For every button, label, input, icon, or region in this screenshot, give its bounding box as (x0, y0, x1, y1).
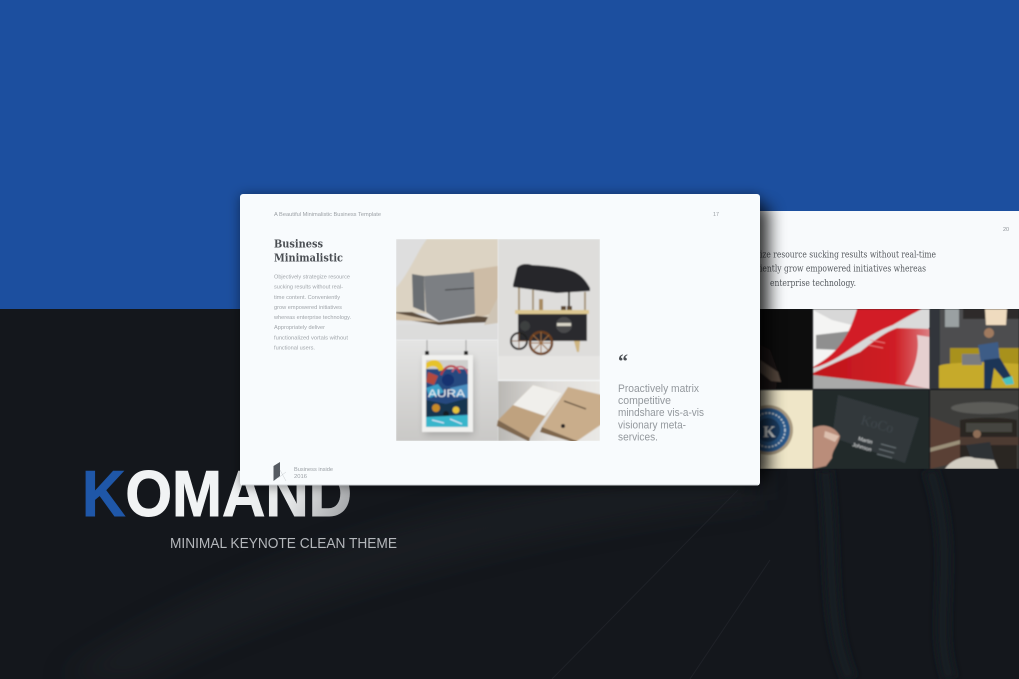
photo: business card in hand: Johnson (851, 442, 872, 453)
body text: grow empowered initiatives (274, 305, 342, 311)
quote text: Proactively matrix (618, 383, 699, 395)
photo: business card in hand: Martin (857, 436, 873, 446)
subtitle: MINIMAL KEYNOTE CLEAN THEME (170, 535, 397, 552)
photo grid: main slide (396, 239, 602, 443)
panel: back slide, page 20 (743, 211, 1019, 469)
body text (273, 274, 351, 352)
photo: man on yellow sofa (930, 309, 1019, 389)
body text: sucking results without real- (274, 284, 343, 290)
photo: black food cart (498, 239, 600, 380)
page number 17: 17 (713, 212, 719, 218)
footer text (294, 467, 333, 480)
body text: whereas enterprise technology. (273, 315, 351, 321)
heading: Business Minimalistic: Business (274, 238, 323, 250)
photo: round stamp logo (760, 389, 814, 469)
photo grid: back slide (743, 309, 1019, 469)
body text: Objectively strategize resource (274, 274, 350, 280)
back slide paragraph: ize resource sucking results without real-time (760, 250, 936, 260)
photo: hanging abstract poster (396, 340, 498, 441)
photo: grey box on linen (396, 239, 498, 340)
photo: man in black (760, 309, 813, 389)
quote text: services. (618, 432, 658, 444)
icon: footer logo (274, 462, 286, 481)
title: KOMAND: KOMAND (82, 457, 352, 530)
slide header: A Beautiful Minimalistic Business Template (274, 212, 381, 218)
photo: hanging abstract poster: AURA (428, 388, 466, 400)
icon: quotation mark: “ (618, 351, 628, 373)
body text: functional users. (274, 346, 315, 352)
photo: business card in hand (813, 390, 929, 469)
background: dark lower area (0, 309, 1019, 679)
background: blue upper band (0, 0, 1019, 309)
photo: kraft packaging boxes (497, 381, 602, 443)
quote text: mindshare vis-a-vis (618, 407, 704, 419)
back slide paragraph: enterprise technology. (770, 279, 856, 289)
body text: Appropriately deliver (274, 325, 325, 331)
footer text: Business inside (294, 467, 333, 473)
body text: time content. Conveniently (274, 295, 340, 301)
heading: Business Minimalistic: Minimalistic (274, 252, 343, 264)
heading: Business Minimalistic (274, 238, 343, 264)
photo: round stamp logo: K (763, 424, 776, 441)
footer text: 2016 (294, 474, 307, 480)
card side shadow (744, 206, 770, 478)
quote text: competitive (618, 395, 671, 407)
quote text (618, 383, 704, 444)
body text: functionalized vortals without (274, 336, 348, 342)
photo: business card in hand: KoCo (859, 413, 895, 437)
quote text: visionary meta- (618, 420, 686, 432)
page number 20: 20 (1003, 227, 1009, 233)
photo: red brochure (813, 309, 930, 389)
back slide paragraph (760, 250, 936, 289)
panel: main slide card (240, 194, 760, 486)
back slide paragraph: iently grow empowered initiatives whereas (760, 264, 926, 274)
photo: woman by old truck (930, 390, 1019, 469)
